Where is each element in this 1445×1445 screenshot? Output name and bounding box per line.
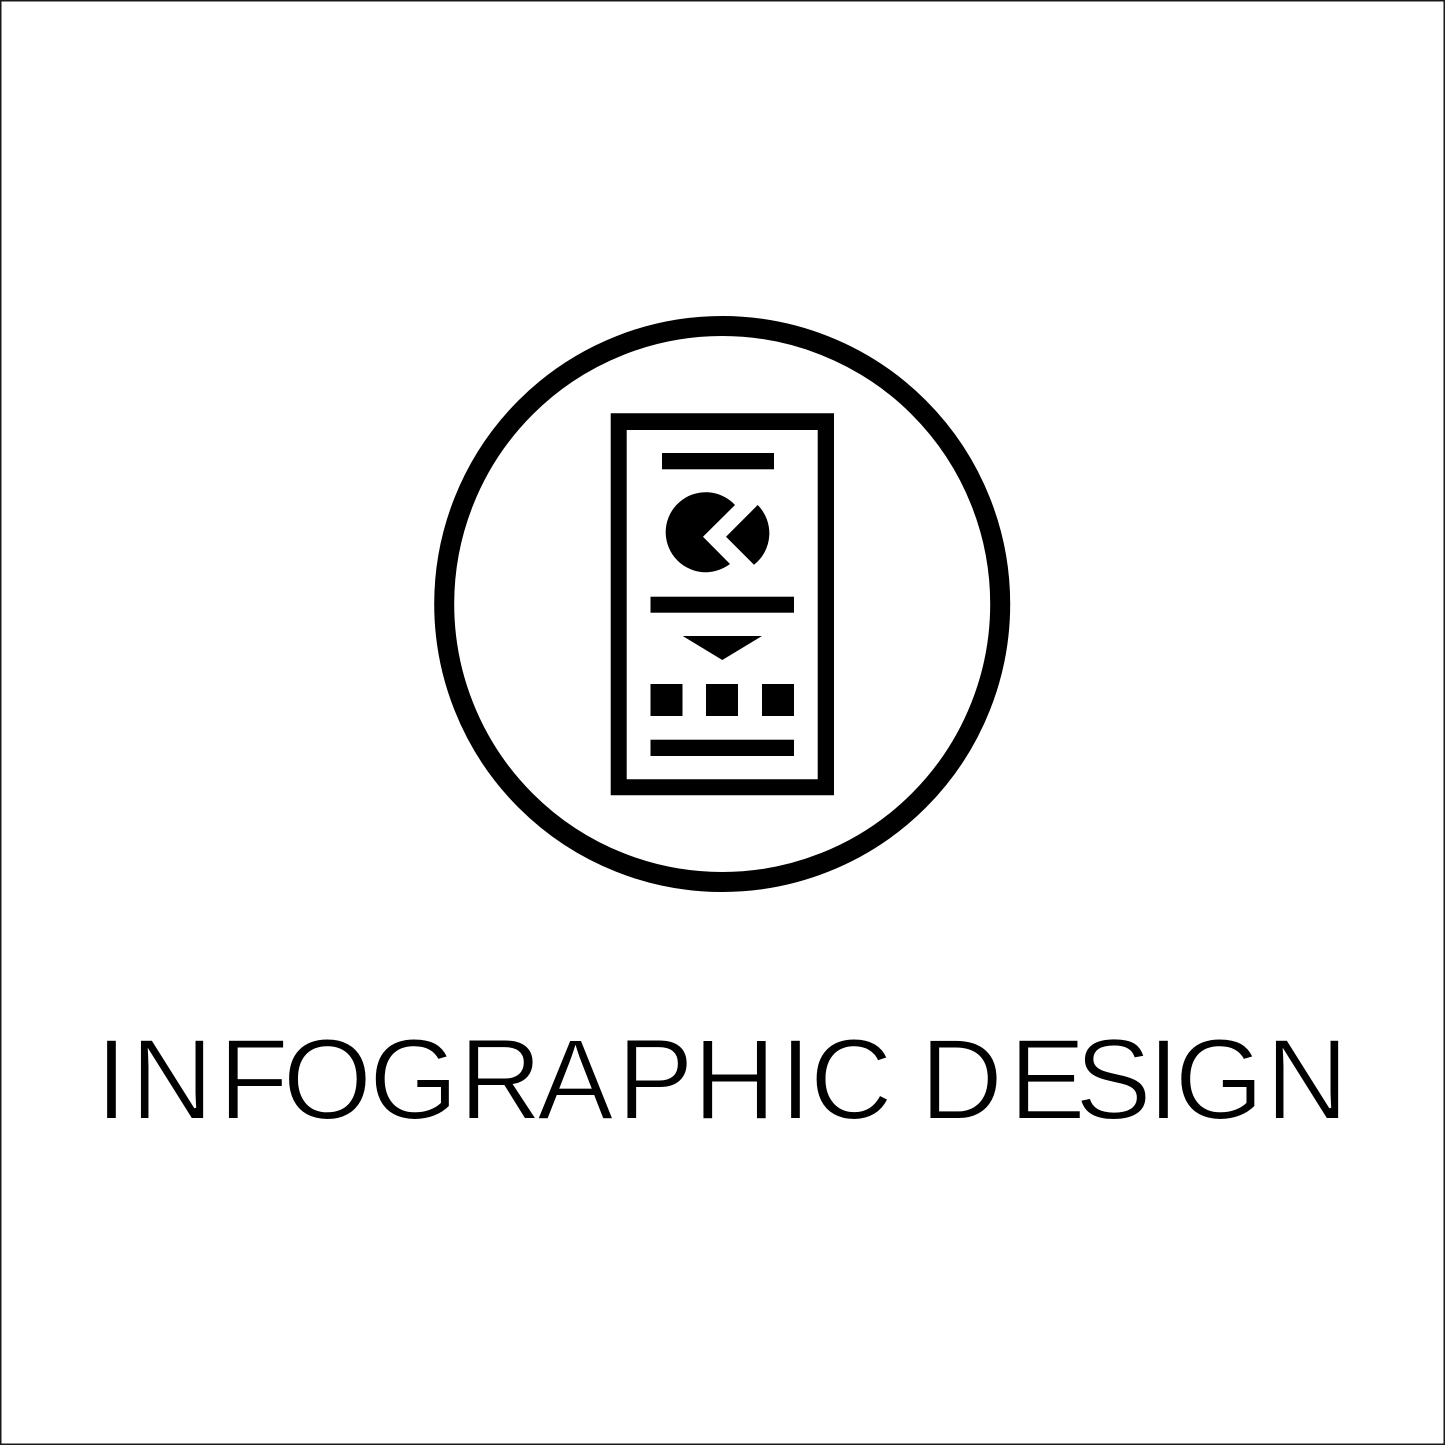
row of three squares [650, 684, 794, 716]
icon: pie chart [666, 492, 769, 572]
right square [762, 684, 794, 716]
pie chart small slice [726, 505, 769, 565]
left square [650, 684, 682, 716]
icon: downward triangle [683, 636, 762, 660]
bottom bar [650, 740, 794, 756]
title: INFOGRAPHIC DESIGN [96, 1016, 1349, 1144]
top title bar [662, 453, 774, 469]
icon: document page frame [611, 413, 834, 795]
pie chart large slice [666, 492, 735, 572]
middle square [706, 684, 738, 716]
icon: infographic emblem [444, 326, 1000, 882]
middle bar [650, 597, 794, 613]
icon: outer circle ring [444, 326, 1000, 882]
